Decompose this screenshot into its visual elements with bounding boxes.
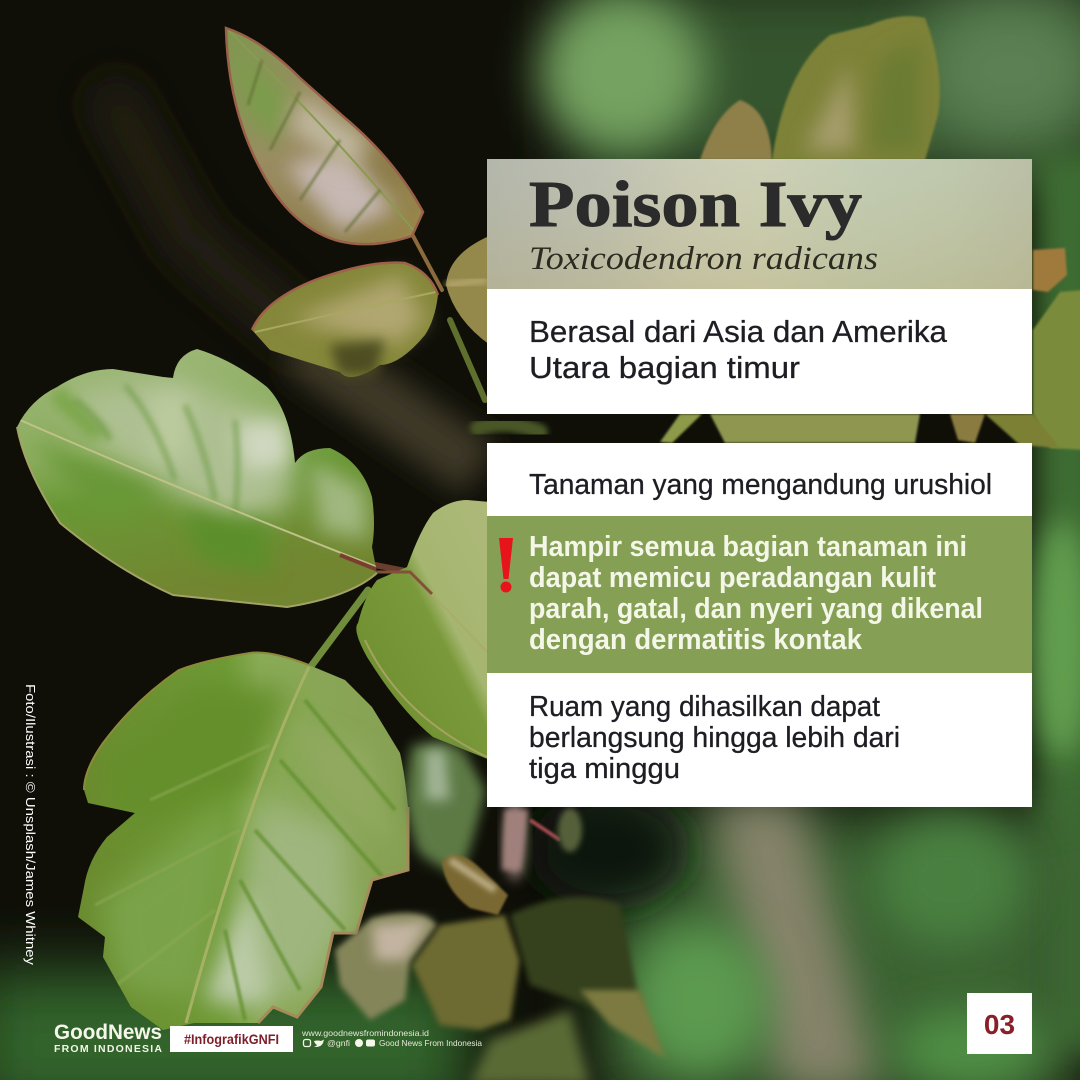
panel: origin: Utara bagian timur (529, 350, 800, 385)
page number: 03 (984, 1009, 1015, 1040)
warning text: Hampir semua bagian tanaman ini (529, 531, 967, 563)
icon: instagram (304, 1040, 310, 1046)
panel: warning (487, 516, 1032, 673)
panel: rash duration: tiga minggu (529, 753, 680, 785)
leaf: small upper middle (252, 263, 438, 377)
panel: origin (487, 289, 1032, 414)
stems (312, 234, 540, 665)
website and social handles: @gnfi (327, 1038, 350, 1048)
icon: facebook (355, 1039, 363, 1047)
icon: twitter (314, 1040, 324, 1047)
panel: urushiol (487, 443, 1032, 516)
panel: rash duration: berlangsung hingga lebih dari (529, 722, 900, 754)
panel: rash duration: Ruam yang dihasilkan dapat (529, 691, 880, 723)
warning text (529, 531, 983, 656)
panel: urushiol: Tanaman yang mengandung urushiol (529, 469, 992, 501)
website and social handles: www.goodnewsfromindonesia.id (301, 1028, 429, 1038)
leaf: top pink-green (226, 28, 423, 244)
heading: Poison Ivy: Poison Ivy (529, 168, 862, 241)
subtitle: latin name: Toxicodendron radicans (529, 241, 878, 277)
panel: origin: Berasal dari Asia dan Amerika (529, 314, 948, 349)
website and social handles: Good News From Indonesia (379, 1038, 482, 1048)
icon: youtube (366, 1040, 375, 1046)
hashtag badge (170, 1026, 293, 1052)
blurred lower leaves and buds (335, 745, 665, 1080)
top-right leaves (700, 16, 940, 160)
photo credit: Foto/Ilustrasi : © Unsplash/James Whitney (23, 684, 38, 966)
page number (967, 993, 1032, 1054)
warning text: parah, gatal, dan nyeri yang dikenal (529, 593, 983, 625)
right leaves (660, 248, 1080, 450)
panel: title (487, 159, 1032, 289)
leaf: middle right (356, 500, 490, 760)
warning text: dengan dermatitis kontak (529, 624, 862, 656)
logo: GoodNews from Indonesia (54, 1021, 162, 1055)
panel: rash duration (487, 673, 1032, 807)
warning text: dapat memicu peradangan kulit (529, 562, 936, 594)
logo: GoodNews from Indonesia: GoodNews (54, 1021, 162, 1044)
icon: red exclamation mark (499, 538, 513, 592)
leaf: small behind panel (446, 237, 490, 345)
hashtag badge: #InfografikGNFI (184, 1031, 279, 1047)
leaf: large bottom (78, 652, 408, 1030)
website and social handles (301, 1028, 482, 1048)
logo: GoodNews from Indonesia: FROM INDONESIA (54, 1043, 162, 1055)
leaf: large left (17, 349, 378, 607)
